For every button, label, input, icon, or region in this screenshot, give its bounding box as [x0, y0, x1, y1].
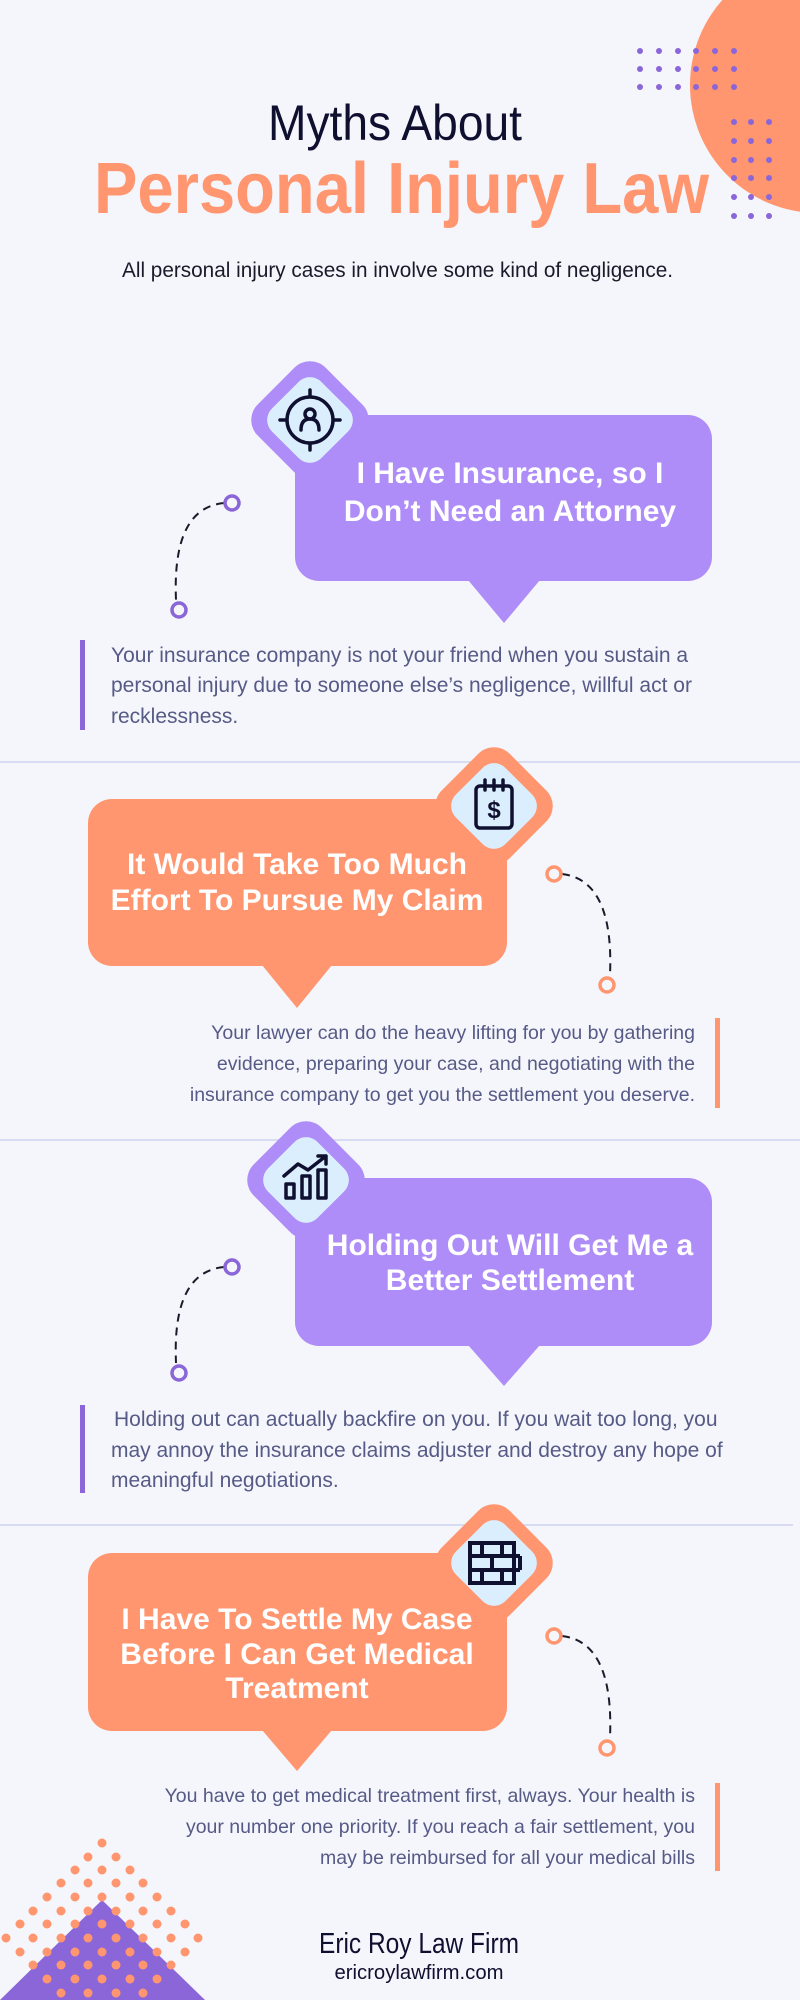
body text 4: may be reimbursed for all your medical bills [320, 1847, 695, 1869]
section 1 bubble: Don’t Need an Attorney [344, 495, 676, 528]
dashed connector 4 [547, 1629, 614, 1755]
subtitle: All personal injury cases in involve some kind of negligence. [122, 259, 673, 282]
footer firm name: Eric Roy Law Firm [319, 1928, 519, 1960]
body text 4: your number one priority. If you reach a fair settlement, you [186, 1816, 695, 1838]
decorative circle top right [690, 0, 800, 213]
body text 1: recklessness. [111, 705, 238, 728]
body text 2 [190, 1022, 695, 1106]
dashed connector 3 [172, 1260, 239, 1380]
icon: invoice dollar [426, 738, 562, 874]
footer url: ericroylawfirm.com [334, 1962, 504, 1984]
section 4 bubble: I Have To Settle My Case [121, 1603, 473, 1636]
dashed connector 1 [172, 496, 239, 617]
dot grid top [637, 48, 737, 90]
body text 3: may annoy the insurance claims adjuster and destroy any hope of [111, 1439, 723, 1462]
section 1 bubble [295, 415, 712, 623]
dashed connector 2 [547, 867, 614, 992]
section 2 bubble: It Would Take Too Much [127, 848, 467, 881]
icon: target person [242, 352, 378, 488]
icon: growth chart [238, 1112, 374, 1248]
section 4 bubble [88, 1553, 507, 1771]
accent bar 3 [80, 1405, 85, 1493]
section 2 bubble: Effort To Pursue My Claim [111, 884, 483, 917]
body text 2: evidence, preparing your case, and negotiating with the [217, 1053, 695, 1075]
body text 4 [165, 1785, 695, 1869]
title line 1: Myths About [268, 95, 522, 151]
icon: invoice dollar: $ [487, 797, 501, 824]
icon: bricks [426, 1495, 562, 1631]
dot grid right [731, 119, 772, 219]
body text 3 [111, 1408, 723, 1492]
section 3 bubble: Holding Out Will Get Me a [327, 1229, 694, 1262]
section 3 bubble: Better Settlement [386, 1264, 634, 1297]
body text 4: You have to get medical treatment first, always. Your health is [165, 1785, 695, 1807]
section 4 bubble: Treatment [225, 1672, 369, 1705]
body text 3: Holding out can actually backfire on you. If you wait too long, you [114, 1408, 718, 1431]
body text 1 [111, 644, 692, 728]
title line 2: Personal Injury Law [94, 149, 710, 229]
body text 3: meaningful negotiations. [111, 1469, 339, 1492]
body text 2: Your lawyer can do the heavy lifting for you by gathering [211, 1022, 695, 1044]
accent bar 2 [715, 1018, 720, 1108]
section 1 bubble: I Have Insurance, so I [357, 457, 663, 490]
body text 2: insurance company to get you the settlement you deserve. [190, 1084, 695, 1106]
section 4 bubble: Before I Can Get Medical [120, 1638, 474, 1671]
section 3 bubble [295, 1178, 712, 1386]
body text 1: personal injury due to someone else’s negligence, willful act or [111, 674, 692, 697]
accent bar 1 [80, 640, 85, 730]
body text 1: Your insurance company is not your friend when you sustain a [111, 644, 688, 667]
section 2 bubble [88, 799, 507, 1008]
decorative triangle with dots [0, 1838, 205, 2000]
accent bar 4 [715, 1783, 720, 1871]
